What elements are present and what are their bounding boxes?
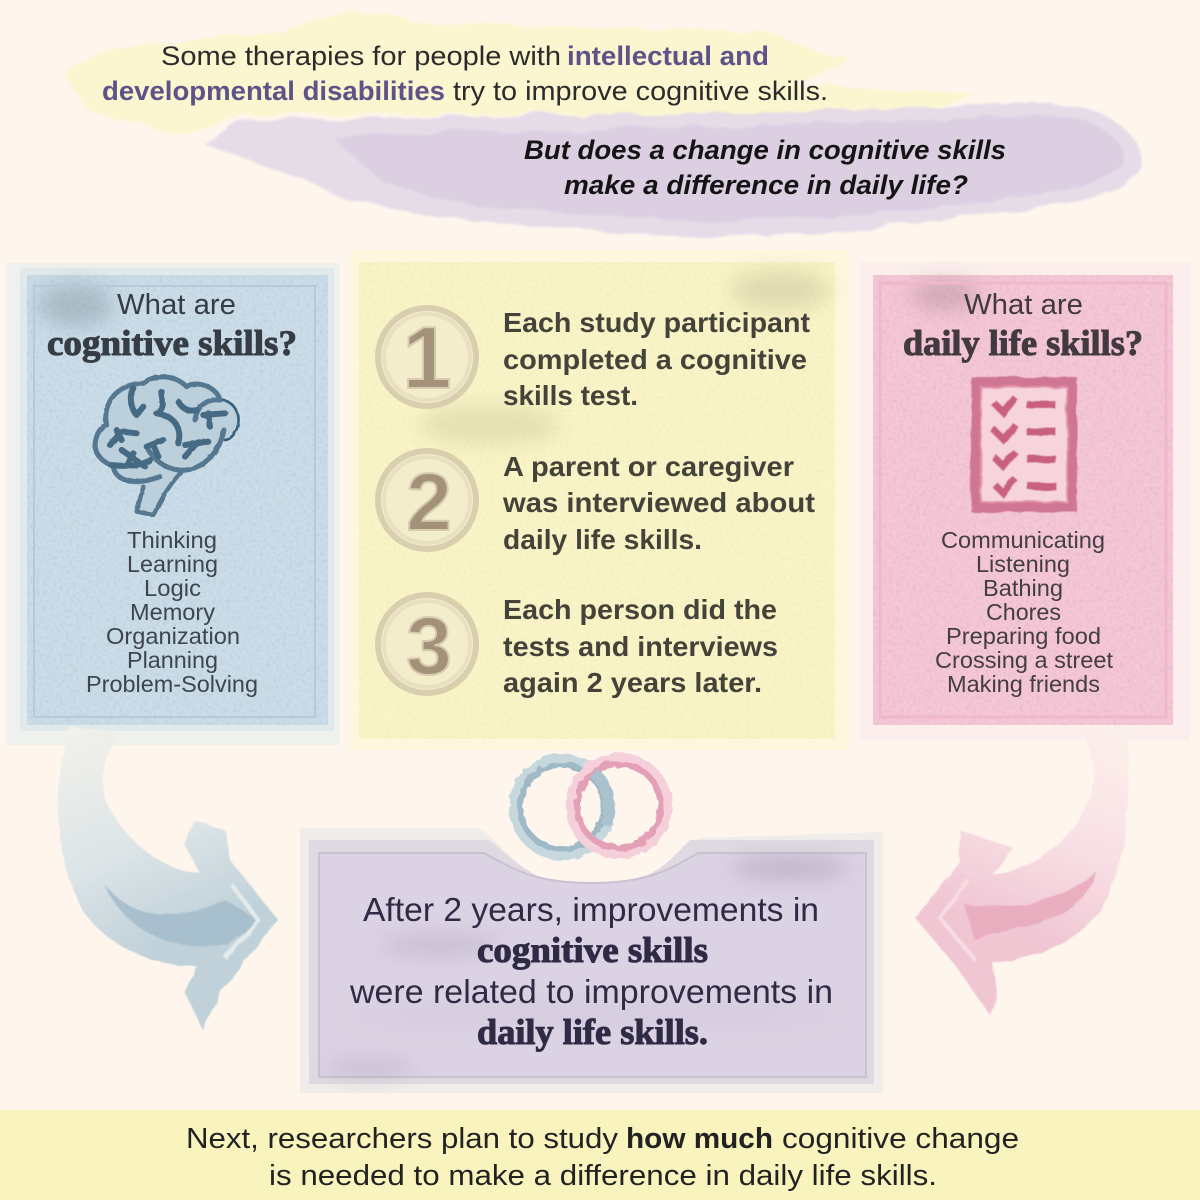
footer text <box>186 1123 1019 1192</box>
heading: cognitive skills? <box>47 323 297 363</box>
list: cognitive skills: Planning <box>127 647 218 673</box>
top brush stroke: purple <box>205 102 1142 238</box>
badge 3 <box>378 595 476 693</box>
conclusion text: cognitive skills <box>477 930 708 970</box>
badge 1 <box>378 308 476 407</box>
list: cognitive skills: Logic <box>144 575 201 601</box>
icon: interlocking rings <box>516 760 665 853</box>
step 1 <box>378 307 810 411</box>
panel: conclusion <box>300 828 883 1093</box>
intro question: make a difference in daily life? <box>564 170 968 200</box>
list: daily life skills: Preparing food <box>946 623 1101 649</box>
footer band <box>0 1110 1200 1200</box>
footer text: is needed to make a difference in daily life skills. <box>269 1160 937 1192</box>
panel: cognitive skills <box>6 263 340 745</box>
intro text: intellectual and <box>567 41 769 71</box>
conclusion text <box>349 891 833 1052</box>
conclusion text: After 2 years, improvements in <box>363 891 819 928</box>
heading: What are <box>964 289 1083 321</box>
conclusion text: were related to improvements in <box>349 973 833 1010</box>
step 1 text: Each study participant <box>503 307 810 338</box>
heading: daily life skills? <box>903 323 1143 363</box>
list: daily life skills: Crossing a street <box>935 647 1114 673</box>
conclusion text: daily life skills. <box>477 1012 708 1052</box>
heading: What are <box>117 289 236 321</box>
intro question <box>524 135 1006 200</box>
badge 2: 2 <box>406 457 452 548</box>
list: cognitive skills: Problem-Solving <box>86 671 258 697</box>
top brush stroke: yellow <box>62 11 980 136</box>
heading <box>903 289 1143 363</box>
heading <box>47 289 297 363</box>
badge 1: 1 <box>403 308 451 407</box>
list: daily life skills: Chores <box>986 599 1061 625</box>
step 2 text: was interviewed about <box>502 487 815 518</box>
step 1 text: skills test. <box>503 380 638 411</box>
intro text <box>102 41 828 106</box>
step 3 text: Each person did the <box>503 594 777 625</box>
intro text: Some therapies for people with <box>161 41 561 71</box>
list: cognitive skills: Memory <box>130 599 216 625</box>
list: cognitive skills: Learning <box>127 551 218 577</box>
step 3 <box>378 594 778 698</box>
arrow: pink <box>915 730 1129 1015</box>
footer text: cognitive change <box>782 1123 1019 1155</box>
step 2 text: daily life skills. <box>503 524 702 555</box>
list: daily life skills: Bathing <box>983 575 1063 601</box>
panel: study steps <box>350 250 850 750</box>
intro question: But does a change in cognitive skills <box>524 135 1006 165</box>
icon: checklist <box>976 382 1072 507</box>
step 2 text: A parent or caregiver <box>503 451 794 482</box>
footer text: Next, researchers plan to study <box>186 1123 619 1155</box>
list: cognitive skills <box>86 527 258 697</box>
step 3 text <box>503 594 778 698</box>
list: daily life skills <box>935 527 1114 697</box>
badge 3: 3 <box>406 601 452 692</box>
list: cognitive skills: Thinking <box>127 527 217 553</box>
step 3 text: tests and interviews <box>503 631 778 662</box>
step 2 <box>378 451 815 555</box>
intro text: try to improve cognitive skills. <box>453 76 828 106</box>
step 2 text <box>502 451 815 555</box>
arrow: blue <box>58 727 278 1030</box>
list: daily life skills: Listening <box>976 551 1070 577</box>
panel: daily life skills <box>860 262 1190 740</box>
list: daily life skills: Making friends <box>947 671 1100 697</box>
badge 2 <box>378 451 476 549</box>
footer text: how much <box>626 1123 773 1155</box>
list: cognitive skills: Organization <box>106 623 240 649</box>
step 1 text <box>503 307 810 411</box>
step 3 text: again 2 years later. <box>503 667 762 698</box>
step 1 text: completed a cognitive <box>503 344 807 375</box>
intro text: developmental disabilities <box>102 76 445 106</box>
list: daily life skills: Communicating <box>941 527 1105 553</box>
icon: brain <box>95 377 239 515</box>
